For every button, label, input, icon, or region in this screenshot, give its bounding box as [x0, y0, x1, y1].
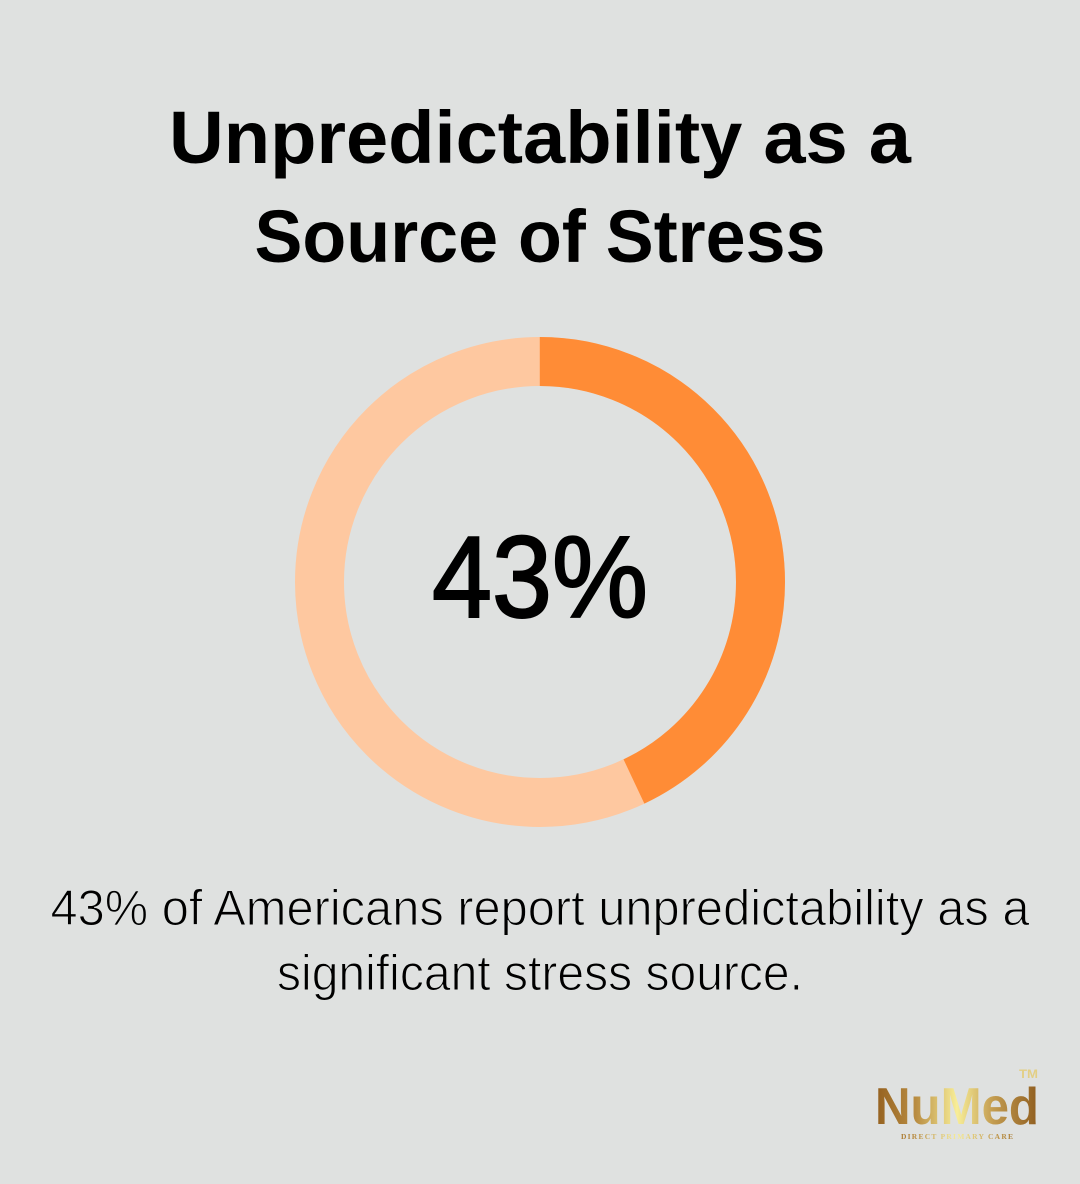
- donut track: [320, 362, 760, 802]
- description: [50, 880, 1030, 1001]
- description: 43% of Americans report unpredictability as a: [50, 880, 1030, 936]
- center value: 43%: [432, 512, 648, 642]
- title: [169, 96, 912, 278]
- title: Unpredictability as a: [169, 96, 912, 179]
- logo trademark: TM: [1019, 1067, 1038, 1081]
- description: significant stress source.: [277, 945, 803, 1001]
- logo wordmark: NuMed: [875, 1078, 1039, 1136]
- title: Source of Stress: [254, 195, 826, 278]
- logo tagline: DIRECT PRIMARY CARE: [901, 1132, 1013, 1141]
- donut chart: 43%: [320, 362, 760, 802]
- logo: NuMed: [875, 1067, 1039, 1141]
- donut value segment: [320, 362, 760, 802]
